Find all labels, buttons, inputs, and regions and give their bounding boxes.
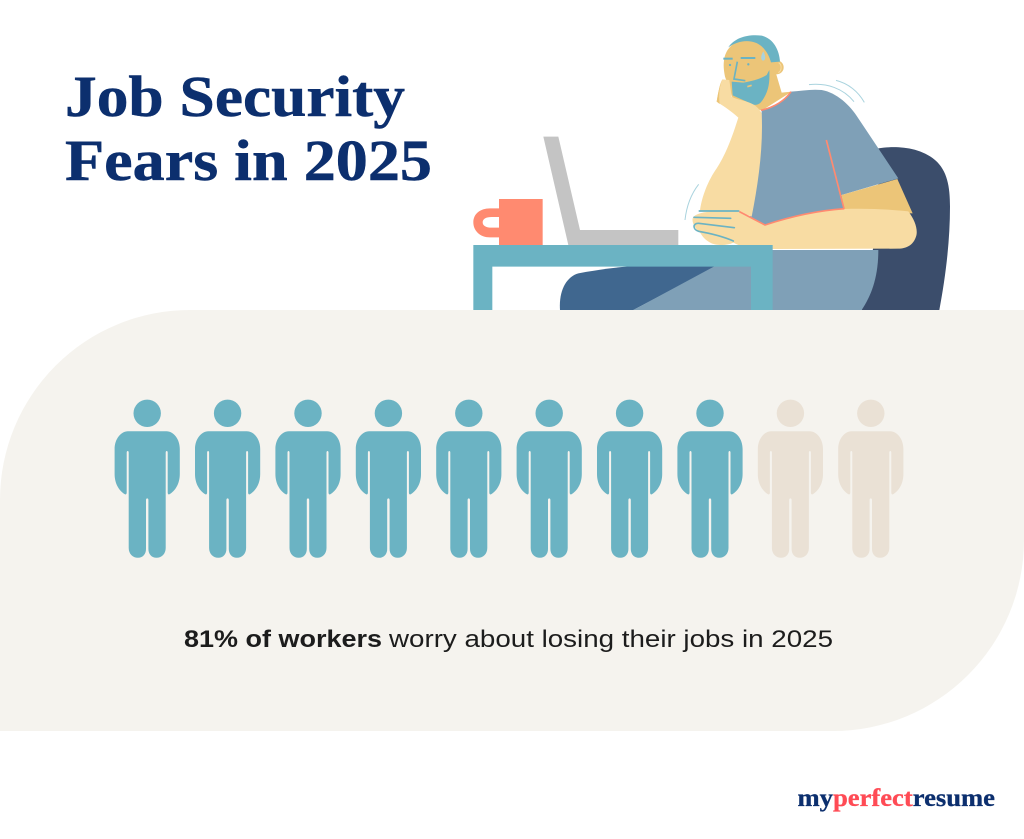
raised arm and hand xyxy=(700,79,762,217)
title: Job Security xyxy=(65,64,405,129)
title: Fears in 2025 xyxy=(65,128,432,193)
panel: background xyxy=(0,310,1024,731)
ear xyxy=(770,60,784,74)
illustration: worried man at desk xyxy=(473,35,950,310)
caption: worry about losing their jobs in 2025 xyxy=(388,626,833,653)
mug xyxy=(473,199,543,245)
pictogram: 8 of 10 workers highlighted xyxy=(115,400,903,558)
figure 10 xyxy=(838,400,903,558)
motion lines xyxy=(685,80,864,220)
shirt torso xyxy=(739,90,898,225)
figure 3 xyxy=(275,400,341,558)
beard xyxy=(732,70,769,105)
figure 2 xyxy=(195,400,260,558)
figure 1 xyxy=(115,400,180,558)
figure 8 xyxy=(677,400,743,558)
fingers xyxy=(694,211,739,241)
hair xyxy=(728,35,780,62)
laptop xyxy=(543,137,678,245)
figure 7 xyxy=(597,400,662,558)
title xyxy=(65,64,432,193)
chair xyxy=(862,147,950,310)
figure 5 xyxy=(436,400,501,558)
legs xyxy=(560,250,878,310)
caption xyxy=(184,626,833,653)
shirt collar xyxy=(761,92,791,110)
neck and head xyxy=(723,35,792,111)
face lines xyxy=(723,58,755,81)
upper arm xyxy=(842,179,913,213)
caption: 81% of workers xyxy=(184,626,382,653)
figure 4 xyxy=(356,400,421,558)
forearm on table xyxy=(693,209,917,249)
figure 6 xyxy=(517,400,582,558)
sweat drop xyxy=(761,51,765,61)
hand shadow xyxy=(717,79,722,104)
logo: myperfectresume xyxy=(798,785,995,812)
shirt seams xyxy=(739,140,844,225)
figure 9 xyxy=(758,400,823,558)
desk xyxy=(473,245,773,310)
